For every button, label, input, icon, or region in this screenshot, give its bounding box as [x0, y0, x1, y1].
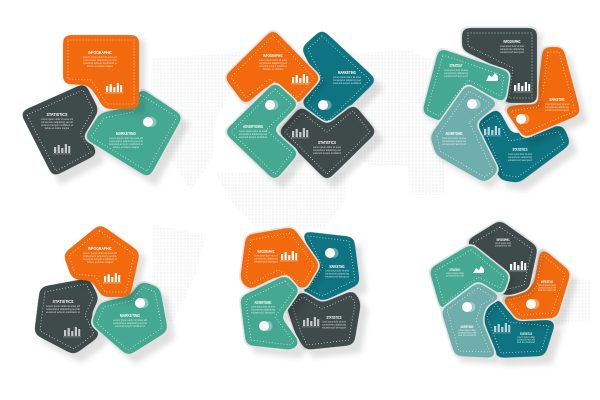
text: advertising: Lorem ipsum dolor [458, 329, 476, 332]
text: statistics [313, 140, 342, 155]
text: statistics: STATISTICS [318, 140, 336, 145]
text: advertising: consectetur elit [458, 332, 476, 334]
text: infographic: Lorem ipsum dolor sit amet [500, 45, 524, 48]
text: marketing: Lorem ipsum dolor [538, 284, 556, 287]
text: statistics [517, 332, 536, 344]
text: advertising: eiusmod tempor [442, 143, 466, 146]
text: marketing: eiusmod tempor incididunt ut [109, 143, 143, 146]
text: marketing: labore et dolore magna [113, 146, 140, 149]
panel: three rounded infographic [20, 35, 190, 186]
text: marketing: consectetur adipiscing [325, 272, 350, 276]
text: statistics: consectetur elit [517, 338, 535, 342]
text: infographic: Lorem ipsum dolor sit amet elit [83, 56, 117, 59]
icon: bar chart [513, 82, 531, 92]
text: marketing: eiusmod tempor incididunt [333, 82, 361, 85]
text: advertising [251, 300, 276, 314]
text: marketing: consectetur elit [538, 286, 556, 290]
text: marketing: sed do eiusmod [538, 289, 557, 292]
text: infographic: eiusmod tempor [254, 260, 278, 264]
text: infographic: Lorem ipsum dolor sit amet elit [83, 252, 117, 255]
icon: bar chart [291, 74, 309, 84]
text: infographic: labore et dolore magna [87, 261, 114, 264]
text: marketing: Lorem ipsum dolor sit amet [545, 103, 569, 106]
icon: bar chart [509, 261, 527, 271]
segment: advertising [240, 275, 307, 358]
text: marketing: MARKETING [120, 313, 140, 318]
text: statistics [46, 299, 81, 314]
text: statistics: STATISTICS [520, 332, 532, 336]
text: strategy [446, 268, 464, 278]
segment: infographic [466, 220, 543, 300]
text: advertising: Lorem ipsum dolor sit amet [239, 130, 267, 133]
text: statistics: eiusmod tempor incididunt ut [41, 124, 73, 127]
text: statistics: STATISTICS [46, 112, 68, 117]
segment: statistics [20, 83, 106, 185]
text: infographic: Lorem ipsum dolor sit amet [259, 59, 287, 62]
text: marketing: consectetur adipiscing sed do [113, 322, 148, 325]
text: advertising: consectetur adipiscing [251, 308, 276, 312]
text: marketing [325, 264, 350, 278]
text: advertising [239, 124, 268, 139]
text: statistics: consectetur adipiscing sed do [41, 121, 74, 124]
text: advertising: ADVERTISING [243, 124, 263, 129]
text: statistics: eiusmod tempor [322, 326, 346, 330]
text: infographic [83, 246, 118, 264]
text: statistics: sed do eiusmod [517, 341, 536, 344]
text: advertising: consectetur adipiscing sed [239, 133, 268, 136]
text: statistics: eiusmod tempor incididunt ut [46, 311, 80, 314]
icon: bar chart [105, 83, 123, 93]
panel: four rounded infographic [224, 29, 384, 189]
text: advertising: Lorem ipsum dolor sit amet [442, 137, 466, 140]
segment: infographic [63, 35, 145, 114]
text: statistics: Lorem ipsum dolor sit amet elit [46, 305, 80, 308]
text: marketing: Lorem ipsum dolor sit amet elit [109, 137, 143, 140]
text: marketing: Lorem ipsum dolor sit amet [325, 270, 349, 272]
text: marketing: Lorem ipsum dolor sit amet [333, 76, 361, 79]
text: infographic: consectetur adipiscing sed do [83, 255, 118, 258]
text: infographic [495, 238, 511, 248]
segment: strategy [429, 244, 515, 316]
text: strategy: STRATEGY [450, 268, 461, 272]
text: advertising: sed do eiusmod [458, 334, 477, 337]
icon: line chart [53, 144, 71, 154]
icon: pie chart [462, 302, 476, 312]
segment: strategy [422, 48, 515, 127]
text: advertising: consectetur adipiscing [442, 140, 467, 143]
text: infographic: INFOGRAPHIC [263, 53, 283, 58]
text: infographic: eiusmod tempor incididunt ut [83, 62, 117, 65]
text: advertising: ADVERTISING [460, 325, 474, 329]
text: advertising: ADVERTISING [254, 300, 272, 305]
segment: marketing [503, 47, 588, 146]
segment: marketing [84, 88, 190, 186]
text: statistics: consectetur adipiscing sed do [46, 308, 81, 311]
text: infographic: consectetur adipiscing sed [259, 62, 288, 65]
text: infographic: Lorem ipsum dolor [495, 242, 511, 245]
text: advertising: ADVERTISING [446, 131, 463, 136]
text: infographic: labore et dolore magna [87, 65, 114, 68]
icon: bar chart [280, 251, 298, 261]
text: infographic: eiusmod tempor incididunt ut [83, 258, 117, 261]
segment: statistics [476, 108, 578, 191]
icon: pie chart [265, 100, 278, 110]
text: marketing: MARKETING [329, 264, 345, 269]
text: marketing: consectetur adipiscing sed [333, 79, 362, 82]
icon: pie chart [467, 99, 480, 109]
text: marketing [333, 70, 362, 85]
text: marketing [545, 97, 570, 112]
text: marketing: eiusmod tempor [325, 276, 349, 278]
text: strategy: Lorem ipsum dolor sit amet [444, 69, 468, 72]
text: statistics: Lorem ipsum dolor sit amet [313, 146, 341, 149]
icon: bar chart [103, 273, 121, 283]
text: infographic: INFOGRAPHIC [88, 50, 113, 55]
icon: pie chart [526, 299, 540, 309]
segment: statistics [286, 290, 368, 358]
text: marketing: MARKETING [116, 131, 136, 136]
icon: pie chart [143, 117, 156, 127]
segment: statistics [278, 104, 384, 189]
text: marketing: MARKETING [541, 280, 553, 284]
text: infographic: labore et dolore [263, 68, 284, 71]
icon: line chart [291, 128, 309, 138]
icon: pie chart [135, 298, 148, 308]
icon: area chart [486, 73, 498, 81]
segment: marketing [91, 281, 175, 364]
segment: statistics [481, 297, 563, 366]
text: statistics: Lorem ipsum dolor sit amet [322, 320, 346, 324]
background: dotted world map [150, 50, 590, 325]
text: statistics: consectetur adipiscing [322, 324, 347, 326]
text: marketing [109, 131, 144, 149]
text: advertising: eiusmod tempor [251, 312, 275, 314]
text: marketing: Lorem ipsum dolor sit amet elit [113, 319, 147, 322]
text: infographic: INFOGRAPHIC [88, 246, 113, 251]
segment: statistics [34, 278, 107, 363]
text: statistics: eiusmod tempor incididunt [313, 152, 341, 155]
text: marketing: eiusmod tempor [545, 109, 569, 112]
text: statistics: Lorem ipsum dolor sit amet elit [41, 118, 73, 121]
panel: four pentagon infographic [240, 227, 368, 358]
text: advertising [442, 131, 467, 146]
text: infographic [254, 249, 279, 264]
segment: infographic [462, 28, 542, 108]
text: advertising [458, 325, 477, 337]
text: marketing [113, 313, 148, 328]
text: strategy: consectetur elit [446, 274, 464, 278]
text: statistics: Lorem ipsum dolor [517, 336, 535, 339]
text: infographic [500, 39, 525, 54]
text: marketing: consectetur adipiscing sed do [109, 140, 144, 143]
icon: pie chart [259, 321, 272, 331]
text: statistics: Lorem ipsum dolor sit amet [508, 153, 532, 156]
text: infographic [83, 50, 118, 68]
text: statistics: STATISTICS [326, 315, 342, 320]
segment: advertising [224, 82, 306, 189]
text: statistics: eiusmod tempor [508, 159, 532, 162]
text: infographic: consectetur adipiscing [500, 48, 525, 51]
text: statistics: consectetur adipiscing sed [313, 149, 342, 152]
text: statistics: STATISTICS [512, 147, 528, 152]
segment: infographic [224, 29, 326, 110]
text: infographic: INFOGRAPHIC [496, 238, 510, 242]
segment: infographic [240, 227, 325, 295]
text: marketing [538, 280, 557, 292]
text: statistics: labore et dolore magna [45, 127, 70, 130]
segment: advertising [441, 282, 507, 364]
icon: line chart [63, 327, 81, 337]
text: strategy: eiusmod tempor [444, 75, 468, 78]
text: strategy: STRATEGY [450, 63, 462, 68]
segment: infographic [63, 224, 146, 302]
text: strategy: Lorem ipsum dolor [446, 272, 464, 275]
icon: pie chart [318, 100, 332, 110]
icon: line chart [483, 126, 501, 136]
icon: line chart [493, 323, 511, 333]
text: marketing: consectetur adipiscing [545, 106, 570, 109]
panel: three pentagon infographic [34, 224, 175, 364]
text: infographic: consectetur adipiscing [254, 258, 279, 260]
text: strategy [444, 63, 469, 78]
text: advertising: eiusmod tempor incididunt [239, 136, 267, 139]
text: infographic: INFOGRAPHIC [258, 249, 275, 254]
icon: line chart [302, 317, 320, 327]
text: infographic: Lorem ipsum dolor sit amet [254, 254, 278, 258]
panel: five pentagon infographic [429, 220, 578, 366]
text: statistics [322, 315, 347, 330]
text: marketing: MARKETING [549, 97, 565, 102]
icon: area chart [473, 266, 484, 273]
text: strategy: consectetur adipiscing [444, 72, 469, 75]
icon: pie chart [325, 248, 338, 258]
icon: pie chart [516, 114, 530, 124]
text: statistics: STATISTICS [52, 299, 74, 304]
text: infographic: INFOGRAPHIC [504, 39, 521, 44]
text: statistics: consectetur adipiscing [508, 156, 533, 159]
segment: advertising [430, 84, 504, 189]
text: advertising: Lorem ipsum dolor sit amet [251, 306, 275, 308]
text: marketing: MARKETING [338, 70, 356, 75]
text: statistics [41, 112, 74, 130]
text: infographic: eiusmod tempor incididunt [259, 65, 287, 68]
segment: marketing [301, 29, 384, 137]
panel: five rounded infographic [422, 28, 588, 191]
segment: marketing [301, 231, 367, 310]
text: marketing: eiusmod tempor incididunt ut [115, 325, 145, 328]
segment: marketing [501, 247, 578, 328]
text: infographic: consectetur elit [495, 244, 511, 248]
text: statistics [508, 147, 533, 162]
text: infographic: consectetur adipiscing sed do [83, 59, 118, 62]
text: infographic [259, 53, 288, 71]
text: infographic: eiusmod tempor [500, 51, 524, 54]
